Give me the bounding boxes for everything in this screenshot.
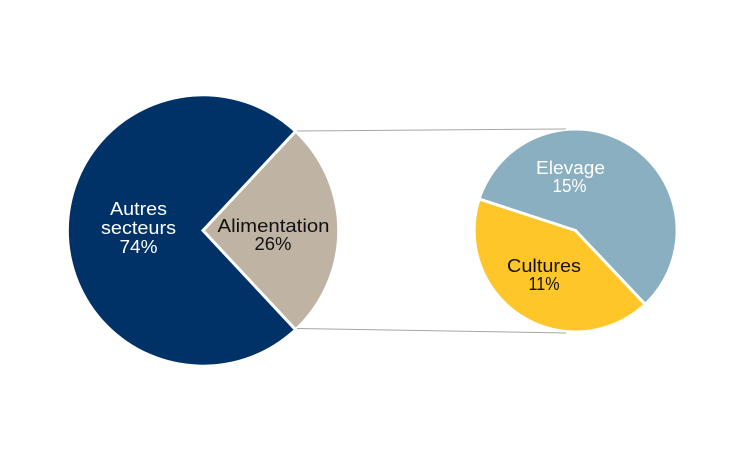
label: autres secteurs: Autres — [110, 199, 167, 219]
label: alimentation: Alimentation — [218, 216, 330, 236]
label: alimentation: 26% — [254, 234, 292, 254]
label: autres secteurs: secteurs — [101, 218, 176, 238]
connector lines between pies — [297, 129, 566, 333]
slice: alimentation — [203, 132, 337, 329]
label: cultures: 11% — [528, 274, 560, 294]
label: autres secteurs: 74% — [120, 237, 158, 257]
label: cultures: Cultures — [507, 256, 581, 276]
secondary pie chart — [476, 130, 676, 330]
slice: cultures — [476, 200, 644, 330]
slice: elevage — [480, 130, 676, 303]
slice: autres secteurs — [69, 96, 295, 365]
main pie chart — [69, 96, 337, 365]
label: elevage: Elevage — [536, 158, 605, 178]
label: elevage: 15% — [552, 176, 586, 196]
